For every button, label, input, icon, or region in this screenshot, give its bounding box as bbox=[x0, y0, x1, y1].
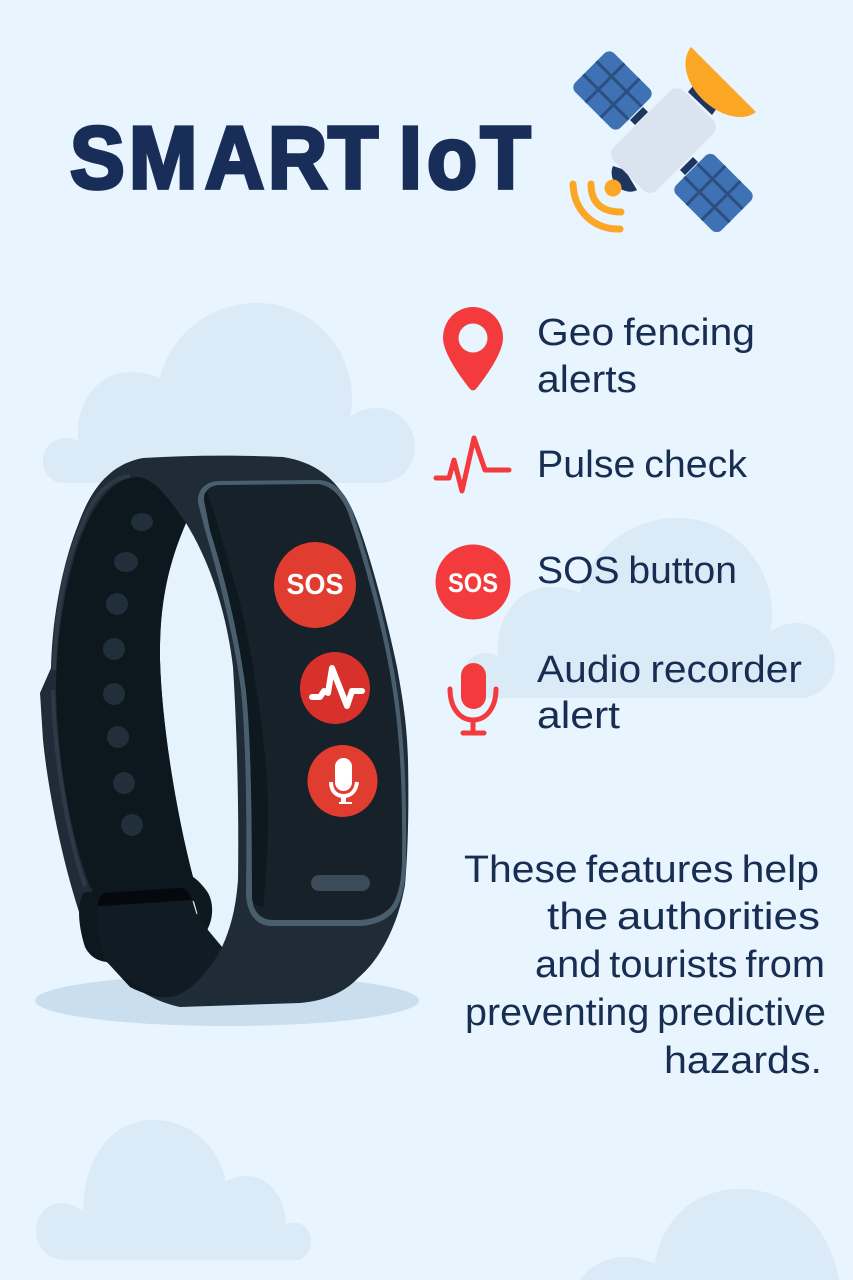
text: closing statement: the authorities bbox=[547, 896, 820, 938]
dish bbox=[685, 47, 756, 117]
sos button: SOS bbox=[286, 569, 344, 601]
text: closing statement: and tourists from bbox=[535, 944, 825, 986]
text: geo fencing alerts: alerts bbox=[537, 359, 637, 401]
strap holes bbox=[103, 513, 153, 836]
dish mount bbox=[688, 86, 717, 115]
text: geo fencing alerts: Geo fencing bbox=[537, 312, 755, 354]
text: geo fencing alerts bbox=[537, 312, 755, 401]
icon: location pin bbox=[443, 307, 503, 390]
icon: satellite bbox=[570, 47, 756, 235]
shadow under bracelet bbox=[35, 975, 419, 1026]
title: SMART IoT bbox=[70, 108, 531, 207]
cloud: behind features bbox=[463, 518, 835, 698]
satellite body bbox=[607, 84, 720, 197]
icon: pulse bbox=[436, 438, 509, 491]
text: audio recorder alert bbox=[537, 649, 802, 737]
screen bbox=[204, 484, 402, 920]
text: closing statement bbox=[464, 849, 826, 1082]
text: closing statement: These features help bbox=[464, 849, 819, 891]
pulse button bbox=[300, 652, 370, 724]
text: closing statement: hazards. bbox=[664, 1040, 822, 1082]
inner hole bbox=[160, 523, 238, 947]
panel connectors bbox=[630, 107, 698, 175]
gap highlight bbox=[193, 901, 197, 914]
cloud: bottom right bbox=[580, 1189, 839, 1280]
solar panel bottom bbox=[671, 151, 756, 235]
indicator pill bbox=[311, 875, 370, 891]
mic button bbox=[308, 745, 378, 817]
text: closing statement: preventing predictive bbox=[465, 992, 826, 1034]
rim stripe bbox=[53, 476, 130, 886]
screen border bbox=[198, 480, 406, 926]
signal dot bbox=[604, 180, 622, 196]
icon: sos: SOS bbox=[448, 568, 498, 598]
buckle opening bbox=[98, 888, 192, 906]
icon: sos bbox=[436, 544, 510, 620]
nozzle bbox=[612, 166, 637, 192]
text: pulse check: Pulse check bbox=[537, 444, 748, 486]
screen inner shade bbox=[204, 491, 268, 907]
signal waves bbox=[573, 184, 621, 229]
bracelet bbox=[40, 456, 408, 1007]
cloud: behind bracelet bbox=[43, 303, 415, 483]
text: sos button: SOS button bbox=[537, 550, 737, 592]
cloud: bottom left bbox=[36, 1120, 311, 1260]
solar panel top bbox=[570, 48, 655, 133]
sos button bbox=[274, 542, 356, 628]
icon: microphone bbox=[450, 663, 496, 733]
buckle loop bbox=[79, 877, 222, 997]
strap inner bbox=[56, 477, 193, 900]
strap under loop bbox=[97, 900, 222, 997]
text: audio recorder alert: alert bbox=[537, 695, 620, 737]
text: audio recorder alert: Audio recorder bbox=[537, 649, 802, 691]
band outer bbox=[40, 456, 408, 1007]
